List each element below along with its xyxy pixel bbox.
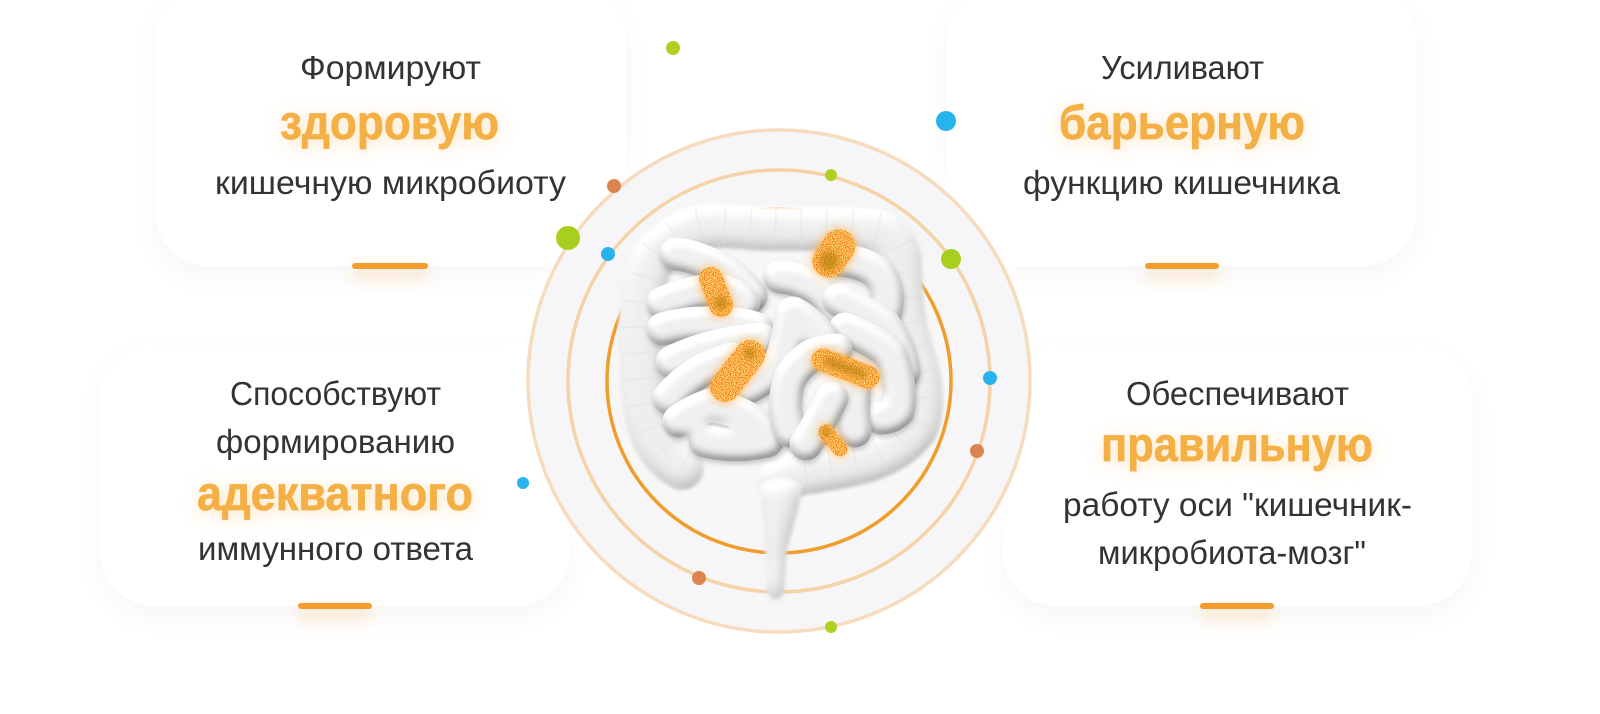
bacteria on intestine <box>711 246 868 449</box>
body line: функцию кишечника <box>1023 164 1341 201</box>
text: healthy microbiota <box>215 49 567 201</box>
body line: микробиота-мозг" <box>1098 534 1366 571</box>
panel: immune response <box>100 345 570 609</box>
panel: barrier function <box>946 0 1417 269</box>
accent bar <box>1200 603 1274 609</box>
rectum <box>759 478 802 600</box>
large intestine <box>640 226 921 600</box>
text: gut-brain axis <box>1063 375 1412 571</box>
bacterium 1 <box>711 279 721 305</box>
highlight word: здоровую <box>280 97 499 150</box>
text: healthy microbiota: Формируют <box>300 49 481 86</box>
inner ring <box>607 209 951 553</box>
text: barrier function: Усиливают <box>1101 49 1264 86</box>
intestine illustration <box>640 226 921 600</box>
bacterium 4 <box>823 360 868 377</box>
outer ring <box>528 130 1030 632</box>
bacterium 5 <box>826 432 840 449</box>
body line: работу оси "кишечник- <box>1063 486 1412 523</box>
accent bar <box>298 603 372 609</box>
panel: gut-brain axis <box>1002 345 1472 609</box>
small intestine loops <box>663 254 904 445</box>
bacterium 3 <box>725 355 750 387</box>
accent bar <box>352 263 428 269</box>
text: barrier function <box>1023 49 1341 201</box>
highlight word: барьерную <box>1059 97 1305 150</box>
bacteria dark cores <box>714 251 862 437</box>
text: immune response <box>197 375 474 567</box>
panel: healthy microbiota <box>155 0 626 269</box>
body line: иммунного ответа <box>198 530 474 567</box>
center disc with rings <box>517 119 1041 643</box>
text: immune response: Способствуют <box>230 375 441 412</box>
colon folds <box>640 226 921 473</box>
body line: кишечную микробиоту <box>215 164 567 201</box>
accent bar <box>1145 263 1219 269</box>
highlight word: правильную <box>1101 419 1373 472</box>
floating dots <box>517 41 997 633</box>
text: gut-brain axis: Обеспечивают <box>1126 375 1349 412</box>
body line: формированию <box>216 423 455 460</box>
bacterium 2 <box>829 246 839 261</box>
middle ring <box>568 170 990 592</box>
highlight word: адекватного <box>197 468 473 521</box>
